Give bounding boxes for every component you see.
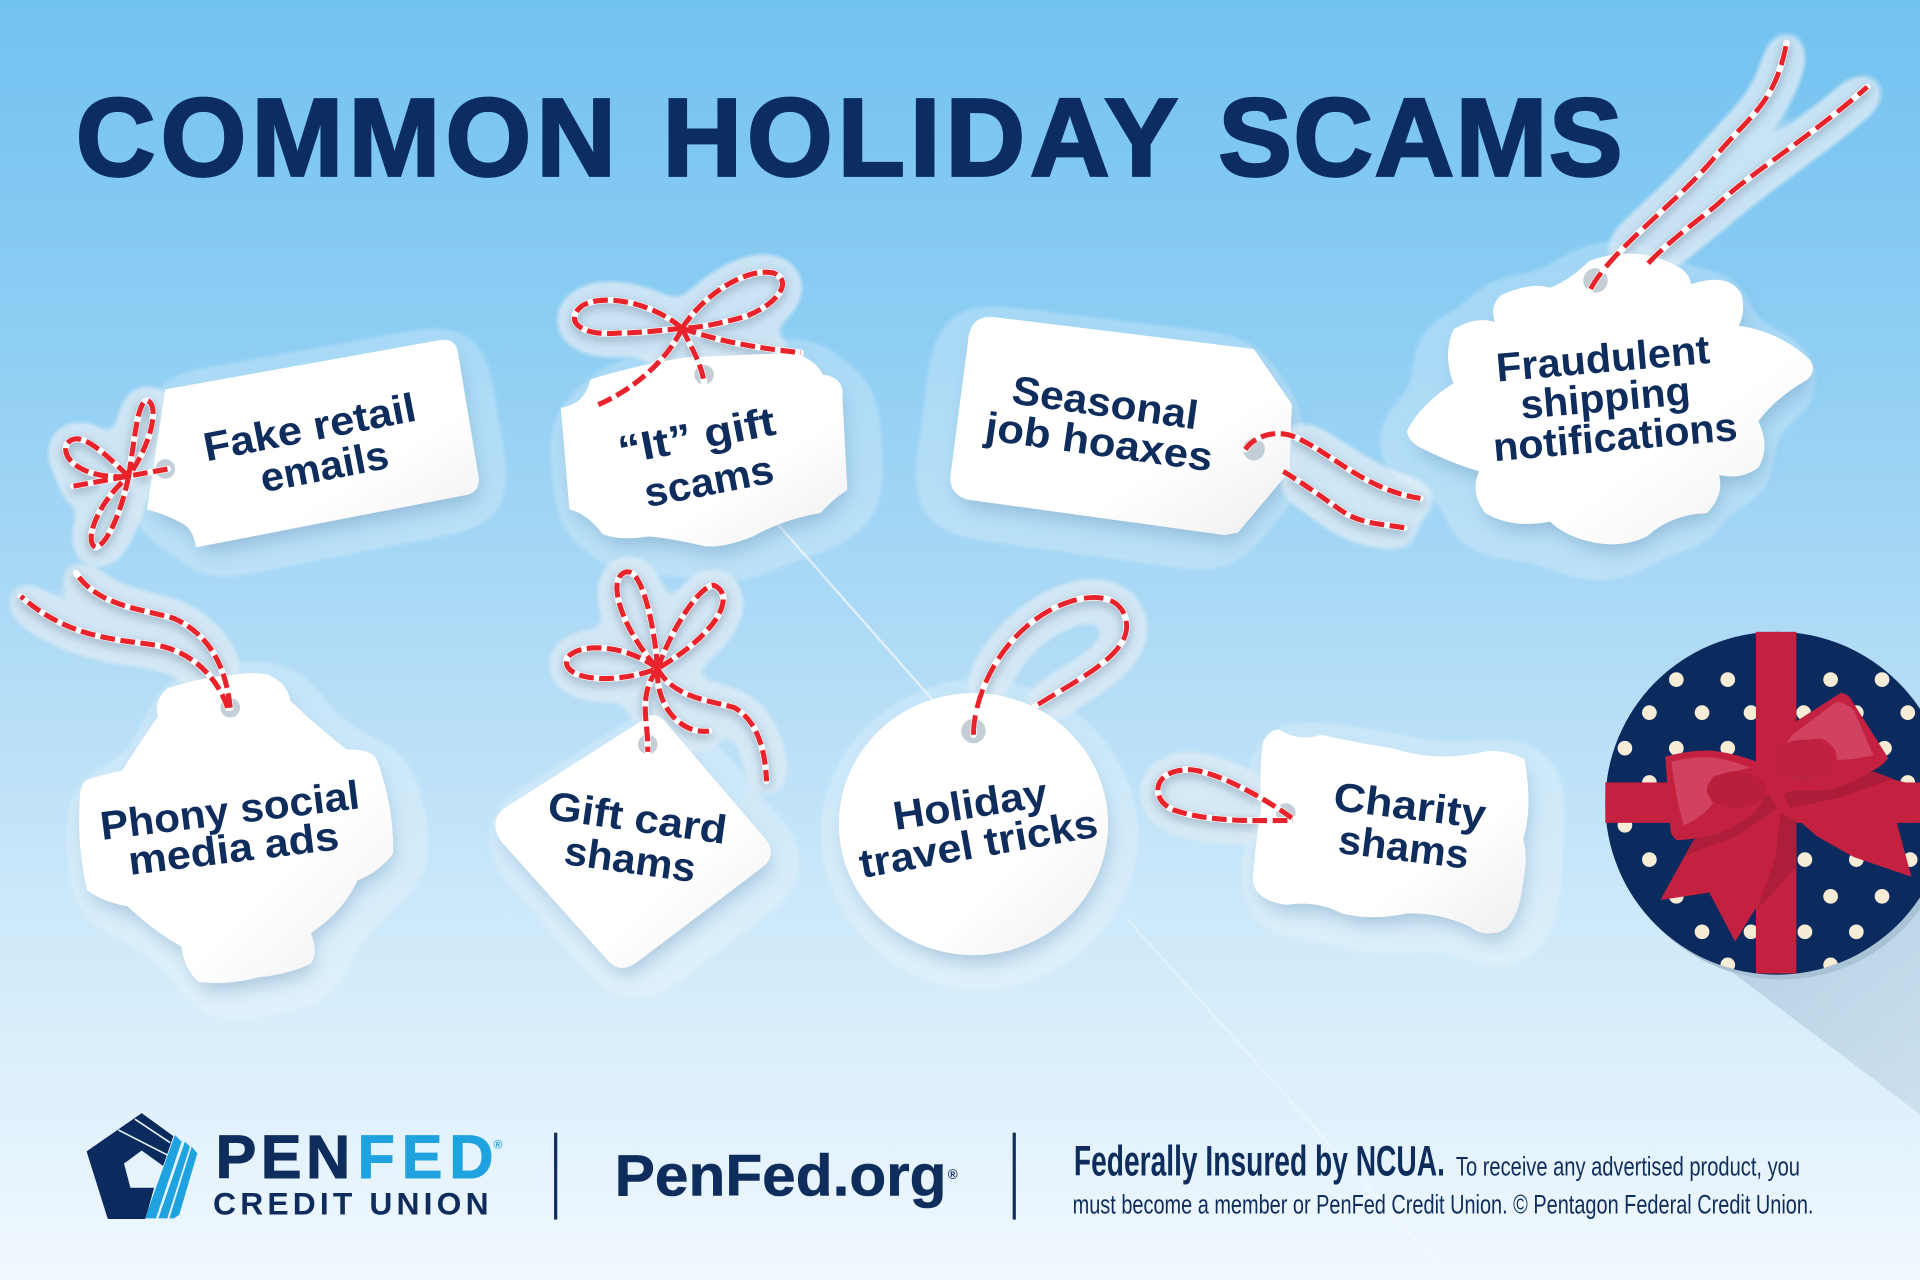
label: Seasonal job hoaxes: Seasonal	[1009, 367, 1201, 438]
tag shape with string	[839, 597, 1127, 955]
label: Fake retail emails: Fake retail	[199, 384, 420, 470]
tag: Fraudulent shipping notifications	[1407, 43, 1867, 544]
label: Gift card shams	[545, 782, 730, 891]
label: Charity shams: Charity	[1331, 773, 1489, 838]
label: Charity shams: shams	[1336, 816, 1472, 878]
tag shape with string	[1407, 43, 1867, 544]
title	[76, 77, 1622, 200]
label: Holiday travel tricks: Holiday	[890, 769, 1051, 839]
tag shape with bow	[561, 272, 847, 547]
tag: Holiday travel tricks	[839, 597, 1127, 955]
disclosure text: To receive any advertised product, you	[1456, 1152, 1800, 1182]
tag: Phony social media ads	[21, 573, 393, 983]
tag: "It" gift scams	[561, 272, 847, 547]
label: Fraudulent shipping notifications	[1491, 326, 1739, 470]
wordmark: CREDIT UNION: CREDIT UNION	[213, 1186, 489, 1222]
logo: PenFed Credit Union	[87, 1114, 502, 1222]
label: Gift card shams: Gift card	[545, 782, 730, 853]
website: PenFed.org: PenFed.org	[615, 1144, 947, 1209]
tag: Charity shams	[1158, 730, 1528, 933]
title: COMMON	[76, 77, 616, 200]
label: Charity shams	[1331, 773, 1489, 878]
disclosure text: Federally Insured by NCUA.	[1074, 1138, 1445, 1186]
title: SCAMS	[1218, 77, 1622, 200]
label: "It" gift scams: “It” gift	[614, 398, 779, 473]
label: Fraudulent shipping notifications: shipping	[1519, 367, 1692, 428]
icon: round gift box with bow	[1605, 632, 1920, 1114]
label: "It" gift scams	[614, 398, 779, 516]
tag: Fake retail emails	[66, 340, 479, 547]
label: Holiday travel tricks: travel tricks	[856, 800, 1101, 887]
tag: Gift card shams	[495, 572, 771, 968]
title: HOLIDAY	[662, 77, 1178, 200]
tag shape with string	[950, 317, 1420, 535]
label: Fraudulent shipping notifications: notifications	[1491, 403, 1739, 470]
tag shape with bow	[66, 340, 479, 547]
label: Phony social media ads: media ads	[125, 812, 341, 884]
label: Gift card shams: shams	[561, 827, 699, 891]
label: Phony social media ads: Phony social	[97, 771, 362, 849]
label: Phony social media ads	[97, 771, 362, 884]
label: Fake retail emails	[199, 384, 420, 501]
label: Fraudulent shipping notifications: Fraudulent	[1494, 326, 1712, 391]
tag shape with string	[21, 573, 393, 983]
tag: Seasonal job hoaxes	[950, 317, 1420, 535]
disclosure text	[1073, 1138, 1813, 1219]
label: "It" gift scams: scams	[640, 446, 777, 516]
icon: pentagon mark	[87, 1114, 197, 1218]
tag shape with bow	[495, 572, 771, 968]
website: PenFed.org: ®	[948, 1167, 958, 1182]
label: Seasonal job hoaxes: job hoaxes	[981, 403, 1216, 480]
tag shape with string	[1158, 730, 1528, 933]
wordmark: FED: FED	[358, 1123, 493, 1191]
label: Seasonal job hoaxes	[981, 367, 1216, 480]
label: Fake retail emails: emails	[256, 431, 392, 501]
label: Holiday travel tricks	[856, 769, 1101, 887]
wordmark: PEN: PEN	[216, 1123, 350, 1191]
registered mark: ®	[493, 1138, 502, 1152]
